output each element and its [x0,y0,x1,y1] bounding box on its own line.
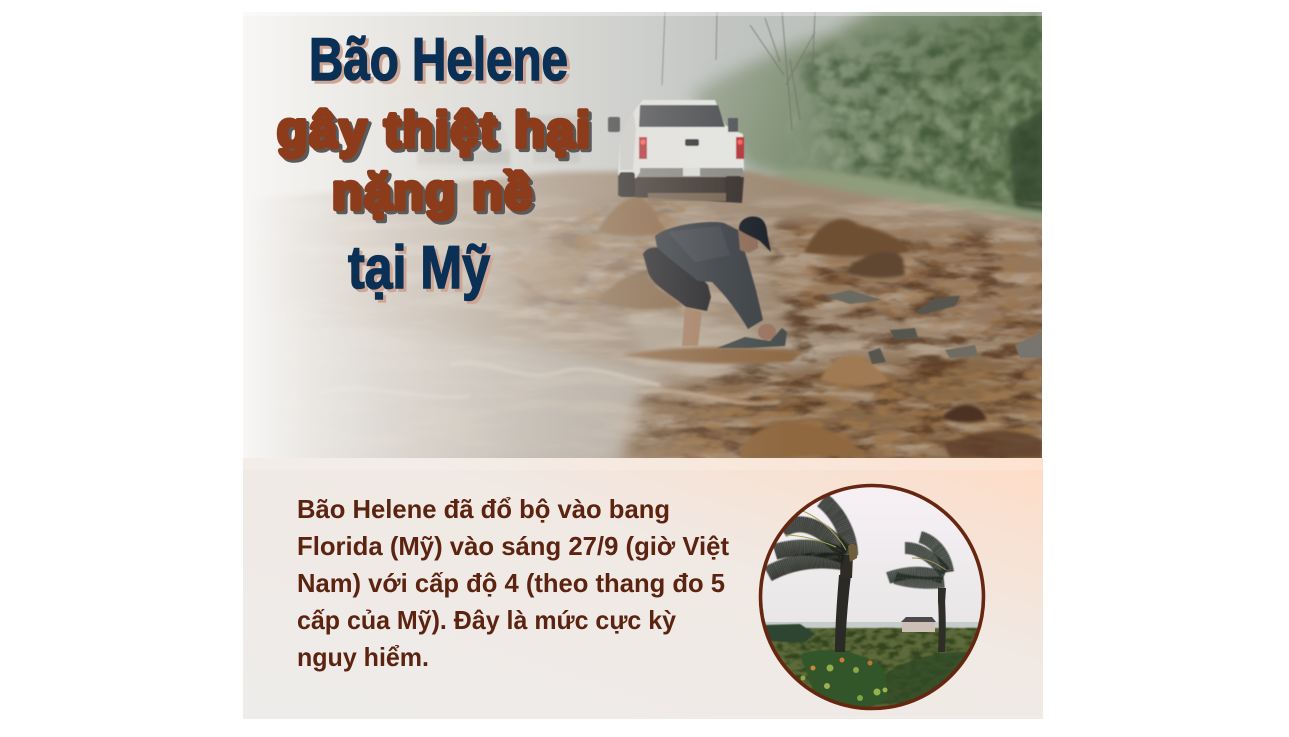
ground: green grass [766,623,978,707]
photo background: green hillside [690,5,1050,226]
photo: white pickup truck [608,100,744,203]
leafy bush [800,658,888,701]
title line: nặng nề: nặng nề [332,164,532,220]
panel: lower text band [243,458,1043,719]
photo: white fog fading from the left [243,16,753,458]
title line: tại Mỹ: tại Mỹ [348,234,491,301]
palm tree left [768,500,857,652]
circular photo: palm trees in storm [755,484,990,715]
small house [901,617,936,632]
title line: gây thiệt hại: gây thiệt hại [277,102,590,158]
body text: Florida (Mỹ) vào sáng 27/9 (giờ Việt [297,531,729,561]
mud texture: orange crests [655,364,1042,458]
palm tree right [888,537,948,652]
body text: nguy hiểm. [297,642,429,672]
title line: tại Mỹ: tại Mỹ [351,237,494,304]
photo: mud clumps [510,197,1042,458]
title [277,26,593,304]
photo background: misty sky [412,12,1042,181]
mud texture: light water streaks [434,198,1042,458]
photo: distant ghost vehicles in fog [417,116,580,166]
panel: hero photo of flooded road [243,5,1050,465]
title line: nặng nề: nặng nề [335,167,535,223]
photo: grey rocks [825,290,1042,364]
title line: gây thiệt hại: gây thiệt hại [280,105,593,161]
photo background: bare trees [662,12,815,130]
photo: muddy road surface [243,170,1050,465]
title line: Bão Helene: Bão Helene [312,29,571,96]
body text: Nam) với cấp độ 4 (theo thang đo 5 [297,568,725,598]
body text: Bão Helene đã đổ bộ vào bang [297,494,670,524]
body text: cấp của Mỹ). Đây là mức cực kỳ [297,605,677,635]
title line: Bão Helene: Bão Helene [309,26,568,93]
mud texture: dark clods [640,225,1050,465]
body text [297,494,729,672]
photo: man bending in floodwater [643,216,787,348]
